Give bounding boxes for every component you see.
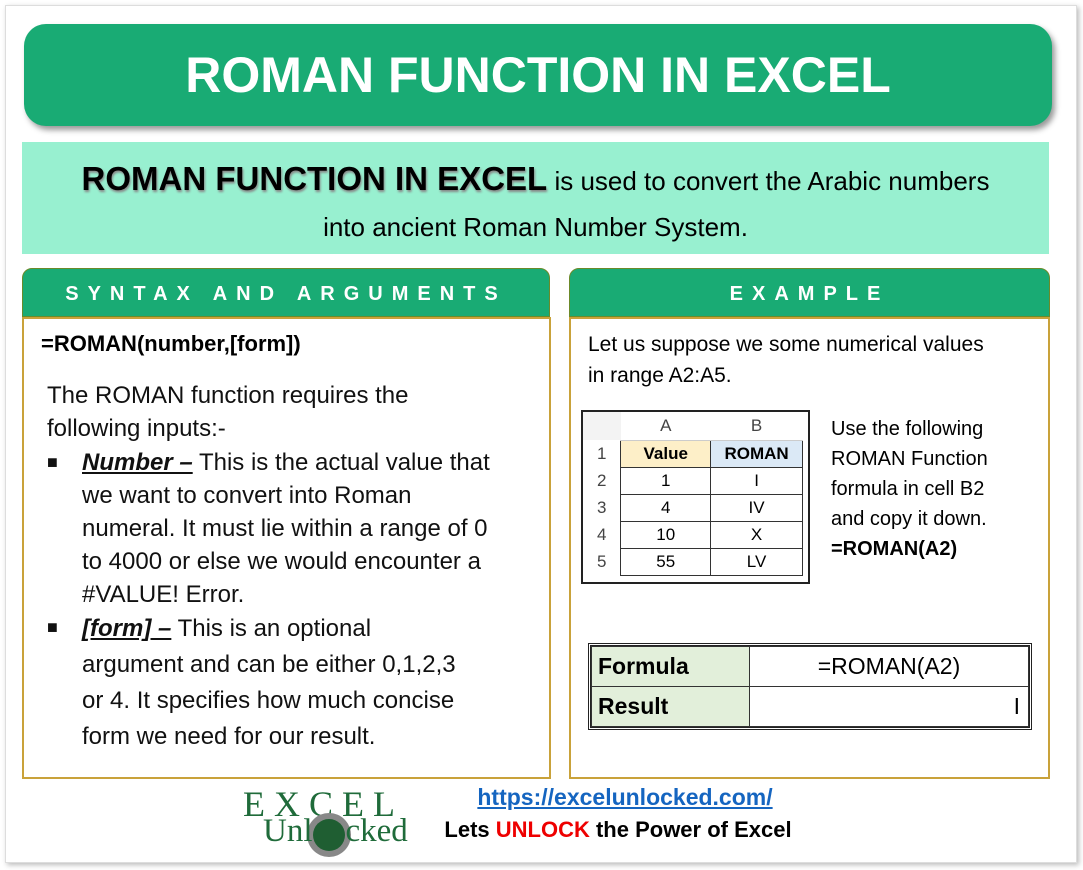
header: example: EXAMPLE — [730, 283, 889, 305]
excel data table: B — [751, 416, 762, 435]
bullet: form: [form] – This is an optional — [82, 615, 371, 642]
instruction text: =ROMAN(A2) — [831, 538, 957, 560]
title: ROMAN FUNCTION IN EXCEL — [185, 47, 891, 103]
formula/result table: Formula — [598, 653, 689, 679]
intro text: following inputs:- — [47, 415, 226, 442]
excel data table: IV — [749, 498, 765, 516]
intro text: The ROMAN function requires the — [47, 382, 408, 409]
instruction text — [831, 418, 988, 560]
excel data table — [581, 410, 810, 584]
excel data table: I — [754, 470, 759, 490]
bullet: number: to 4000 or else we would encounter a — [82, 548, 481, 575]
definition box: into ancient Roman Number System. — [323, 212, 748, 242]
excel data table: 3 — [597, 498, 606, 516]
instruction text: ROMAN Function — [831, 448, 988, 470]
excel data table: LV — [747, 552, 766, 570]
bullet: number: ■ — [47, 452, 58, 472]
excel data table: 4 — [597, 524, 606, 544]
header: syntax and arguments — [22, 268, 550, 317]
intro text — [47, 382, 408, 442]
bullet: form: or 4. It specifies how much concise — [82, 687, 454, 714]
bullet: form: argument and can be either 0,1,2,3 — [82, 651, 456, 678]
bullet: number: #VALUE! Error. — [82, 581, 244, 608]
excel data table: 55 — [656, 552, 675, 570]
syntax formula: =ROMAN(number,[form]) — [41, 331, 301, 356]
bullet: number: we want to convert into Roman — [82, 482, 412, 509]
bullet: form — [47, 615, 456, 750]
bullet: number: numeral. It must lie within a range of 0 — [82, 515, 488, 542]
footer url and tagline: https://excelunlocked.com/ — [477, 784, 773, 810]
excel data table: A — [660, 416, 671, 435]
logo: Unl cked — [263, 813, 408, 849]
excel data table: 1 — [597, 444, 606, 462]
excel data table: ROMAN — [724, 444, 789, 462]
header: syntax and arguments: SYNTAX AND ARGUMENTS — [65, 283, 507, 305]
logo — [243, 784, 408, 857]
formula/result table — [588, 643, 1032, 730]
instruction text: formula in cell B2 — [831, 478, 984, 500]
excel data table: 5 — [597, 552, 606, 570]
icon: lock — [307, 813, 351, 857]
example intro: Let us suppose we some numerical values — [588, 333, 984, 356]
formula/result table: Result — [598, 693, 668, 719]
example intro — [588, 333, 984, 387]
bullet: form: ■ — [47, 617, 58, 637]
formula/result table: I — [1014, 693, 1020, 719]
panel: syntax — [22, 317, 551, 779]
footer url and tagline — [444, 784, 792, 842]
title — [24, 24, 1052, 126]
instruction text: and copy it down. — [831, 508, 987, 530]
definition box — [22, 142, 1049, 254]
instruction text: Use the following — [831, 418, 983, 440]
bullet: number: Number – This is the actual value that — [82, 449, 490, 476]
excel data table: 1 — [661, 470, 670, 490]
formula/result table: =ROMAN(A2) — [818, 653, 960, 679]
definition box: ROMAN FUNCTION IN EXCEL is used to convert the Arabic numbers — [82, 160, 989, 197]
bullet: number — [47, 449, 490, 608]
excel data table: Value — [644, 444, 688, 462]
header: example — [569, 268, 1050, 317]
logo: EXCEL — [243, 784, 404, 824]
excel data table: 10 — [656, 524, 675, 544]
excel data table: X — [751, 524, 762, 544]
panel: example — [569, 317, 1050, 779]
excel data table: 2 — [597, 470, 606, 490]
footer url and tagline: Lets UNLOCK the Power of Excel — [444, 817, 792, 842]
bullet: form: form we need for our result. — [82, 723, 375, 750]
example intro: in range A2:A5. — [588, 364, 732, 387]
excel data table: 4 — [661, 498, 670, 516]
